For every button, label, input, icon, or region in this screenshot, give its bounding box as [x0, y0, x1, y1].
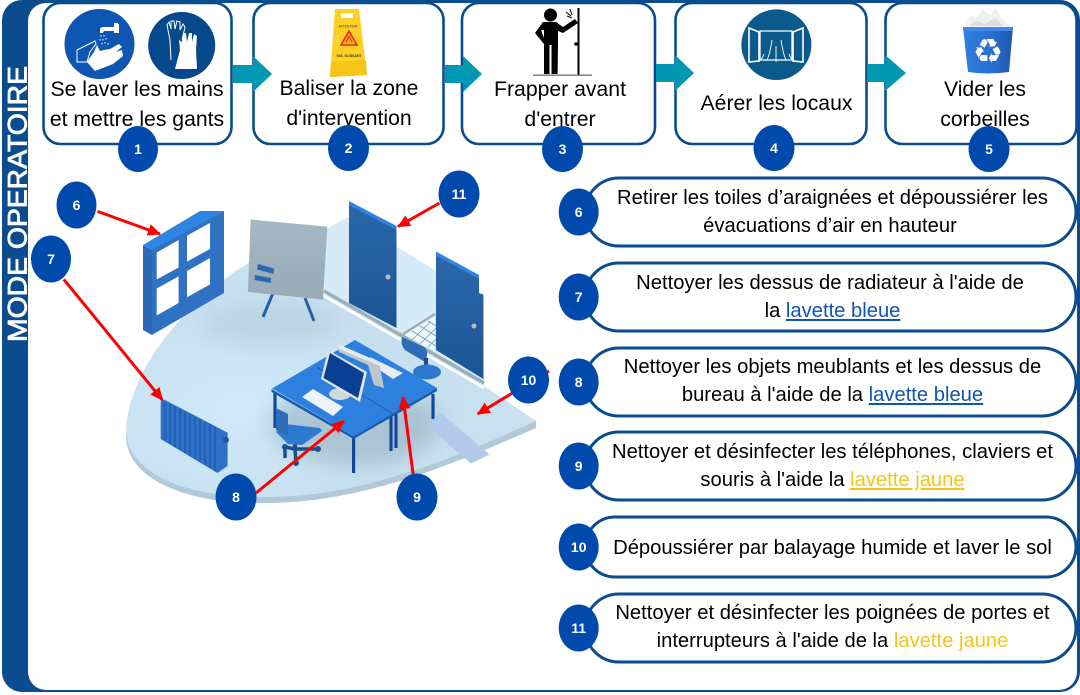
arrow: step 4 to 5	[867, 55, 906, 91]
label: step 5 text: corbeilles	[940, 108, 1030, 131]
front keyboard	[302, 389, 343, 416]
badge 11	[438, 170, 480, 218]
list item 7: Nettoyer les dessus de radiateur à l'aide de	[636, 272, 1024, 294]
list item 10: 10	[571, 539, 587, 555]
list item 11: interrupteurs à l'aide de la lavette jaune	[657, 630, 1008, 652]
whiteboard	[248, 220, 327, 321]
list item 9: Nettoyer et désinfecter les téléphones, claviers et	[612, 441, 1053, 463]
window	[143, 211, 224, 335]
front chair	[276, 408, 322, 466]
list item 6	[559, 178, 1076, 246]
panel: step 1	[44, 3, 232, 144]
list item 6: Retirer les toiles d’araignées et dépoussiérer les	[617, 187, 1048, 209]
badge 10	[508, 356, 549, 404]
badge 9	[396, 474, 438, 520]
list item 6: évacuations d’air en hauteur	[703, 215, 957, 237]
list item 9	[559, 432, 1076, 500]
label: step 1 text: et mettre les gants	[50, 108, 224, 131]
icon: gloves	[148, 12, 215, 79]
step number badges: 1	[134, 141, 142, 157]
list item 8: Nettoyer les objets meublants et les dessus de	[624, 356, 1041, 378]
back wall	[324, 217, 484, 388]
door 1	[349, 201, 396, 328]
icon: recycling bin	[963, 8, 1013, 74]
arrow: to radiator	[64, 279, 162, 400]
label: step 1 text: Se laver les mains	[50, 78, 224, 101]
arrow: step 2 to 3	[445, 56, 482, 92]
list item 7: la lavette bleue	[765, 300, 900, 322]
list item 8: 8	[575, 374, 583, 390]
radiator	[161, 400, 229, 473]
badge 8	[216, 474, 256, 520]
badge 7: 7	[47, 251, 55, 267]
label: step 3 text: Frapper avant	[494, 78, 626, 101]
illustration: isometric office	[31, 170, 549, 520]
far chair	[401, 337, 441, 380]
label: step 4 text: Aérer les locaux	[701, 92, 853, 115]
arrow: step 1 to 2	[233, 56, 272, 92]
list item 8: bureau à l'aide de la lavette bleue	[682, 384, 983, 406]
icon: open window	[741, 9, 811, 80]
step number badges	[118, 125, 1010, 172]
mop ramp	[427, 412, 490, 464]
panel: step 3	[462, 3, 655, 144]
list item 11	[559, 594, 1076, 662]
badge 7	[31, 236, 71, 282]
label: step 2 text: d'intervention	[286, 107, 412, 130]
icon: recycling bin: ♻	[973, 32, 1003, 72]
icon: hand washing	[64, 9, 134, 79]
panel: step 4	[676, 3, 866, 144]
arrow: step 3 to 4	[656, 55, 694, 91]
icon: wet floor sign	[330, 9, 367, 77]
rear keyboard and monitor	[338, 344, 403, 388]
desks	[272, 340, 437, 473]
step number badges: 3	[559, 141, 567, 157]
icon: wet floor sign: ATTENTION	[339, 24, 358, 28]
badge 8: 8	[232, 489, 240, 505]
arrow: to door handle	[398, 203, 440, 227]
arrow: to floor	[478, 371, 549, 414]
step number badges: 5	[985, 141, 993, 157]
icon: person knocking on door	[533, 8, 592, 76]
list item 11: Nettoyer et désinfecter les poignées de portes et	[615, 602, 1050, 624]
sidebar title: MODE OPERATOIRE	[2, 66, 32, 342]
step number badges: 2	[345, 140, 353, 156]
label: step 3 text: d'entrer	[524, 108, 596, 131]
list item 6: 6	[575, 204, 583, 220]
arrow: to window	[98, 211, 160, 234]
list item 11: 11	[571, 620, 586, 636]
badge 10: 10	[521, 372, 536, 388]
label: step 2 text: Baliser la zone	[280, 77, 418, 100]
door 2	[436, 252, 483, 379]
floor slab	[126, 262, 536, 503]
list item 9: souris à l'aide la lavette jaune	[700, 469, 965, 491]
badge 11: 11	[452, 186, 467, 202]
panel: step 2	[254, 3, 444, 144]
arrow: to desk	[256, 421, 344, 493]
list item 8	[559, 348, 1076, 416]
list item 9: 9	[575, 458, 583, 474]
list item 7: 7	[575, 289, 583, 305]
list item 10: Dépoussiérer par balayage humide et laver le sol	[613, 537, 1052, 559]
badge 9: 9	[413, 489, 421, 505]
list item 7	[559, 263, 1076, 331]
panel: step 5	[886, 3, 1076, 144]
badge 6: 6	[73, 197, 81, 213]
icon: wet floor sign: SOL GLISSANT	[336, 54, 362, 58]
step number badges: 4	[770, 140, 778, 156]
badge 6	[56, 182, 96, 228]
front monitor	[321, 350, 367, 402]
arrow: to phone	[403, 397, 413, 476]
list item 10	[559, 517, 1076, 577]
label: step 5 text: Vider les	[944, 78, 1026, 101]
